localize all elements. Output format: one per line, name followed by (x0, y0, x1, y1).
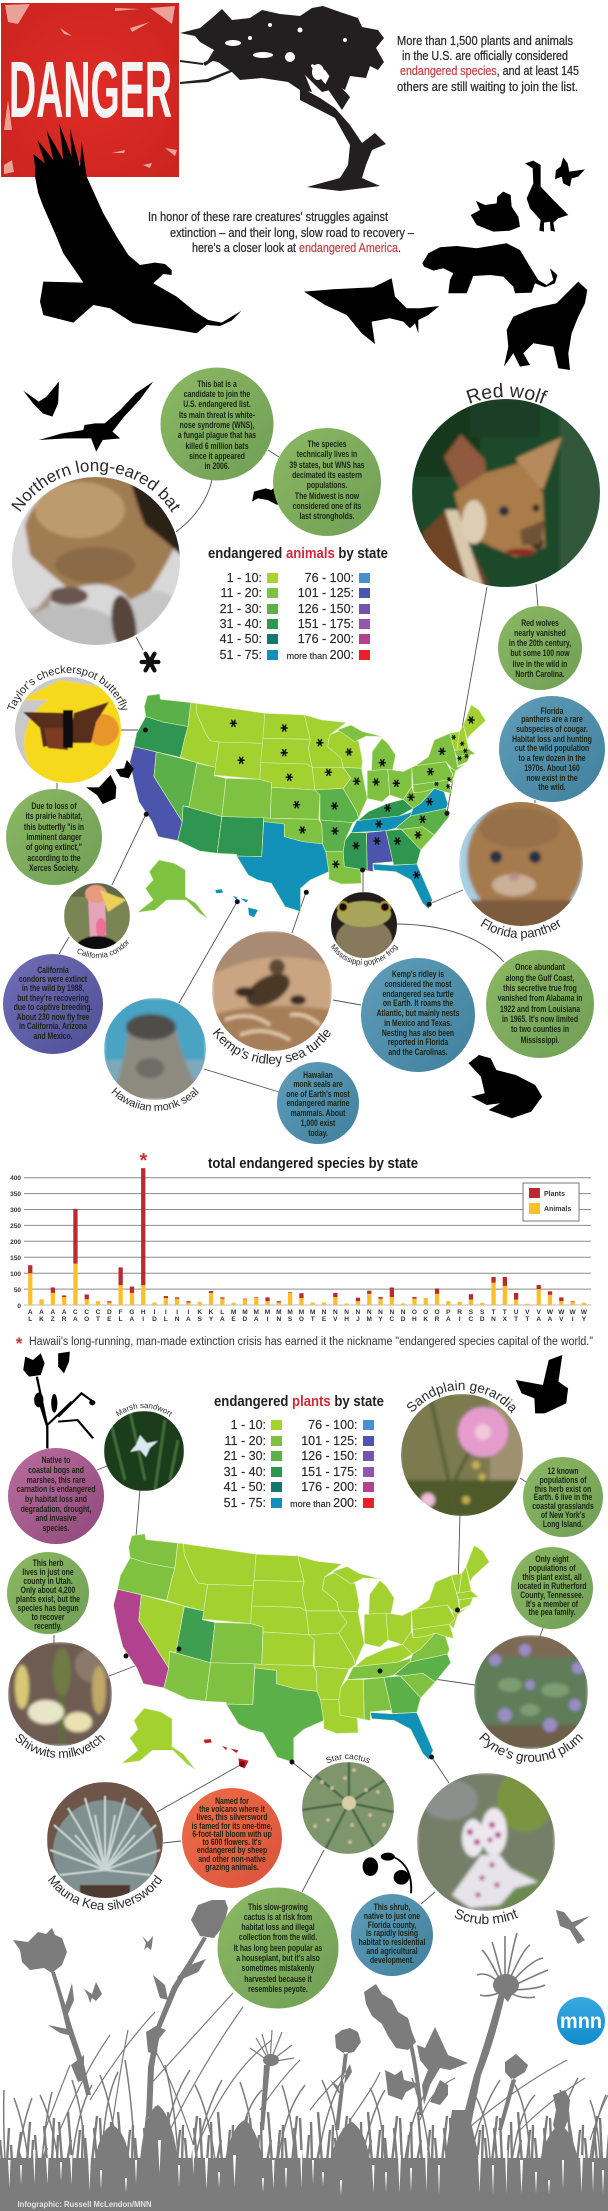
bubble: kemp's ridley: reported in Florida (388, 1037, 449, 1047)
bubble: scrub mint: native to just one (364, 1911, 421, 1921)
bubble: mauna kea silversword: Named for (215, 1796, 249, 1806)
legend: endangered animals: 76 - 100: (305, 571, 354, 585)
bubble: star cactus: habitat loss and illegal (241, 1922, 315, 1932)
bubble: star cactus: a houseplant, but it's also (236, 1953, 320, 1963)
bubble: sandplain gerardia: Earth. 6 live in the (534, 1492, 593, 1502)
bubble: star cactus: This slow-growing (248, 1902, 308, 1912)
label: mississippi gopher frog: Mississippi gopher frog (330, 944, 398, 966)
label: northern long-eared bat: Northern long-eared bat (11, 460, 180, 513)
photo: mauna kea silversword (47, 1782, 163, 1904)
photo: mississippi gopher frog (330, 892, 398, 962)
text: DANGER (9, 45, 172, 134)
tree silhouette (180, 6, 386, 191)
bubble: california condor: in California, Arizona (19, 1021, 88, 1031)
chart: total endangered species by state: 200 (10, 1239, 21, 1246)
bubble: bat range: The Midwest is now (295, 491, 360, 501)
label: sandplain gerardia: Sandplain gerardia (407, 1380, 516, 1414)
bubble: kemp's ridley: in Mexico and Texas. (384, 1018, 452, 1028)
grass clumps (95, 2105, 578, 2160)
bubble: scrub mint: and agricultural (366, 1946, 418, 1956)
icon: dragonfly (556, 1910, 590, 1944)
legend: endangered plants: 21 - 30: (224, 1449, 266, 1463)
credit: Infographic: Russell McLendon/MNN (18, 2199, 152, 2209)
chart: total endangered species by state: 0 (17, 1303, 21, 1310)
bubble: butterfly: Xerces Society. (29, 863, 79, 873)
bubble: florida panther: cut the wild population (515, 743, 589, 753)
legend: endangered animals: 151 - 175: (298, 617, 354, 631)
photo: hawaiian monk seal (104, 998, 206, 1100)
bubble: mauna kea silversword: grazing animals. (205, 1862, 259, 1872)
bubble: sandplain gerardia (523, 1457, 603, 1537)
bubble: red wolf: nearly vanished (514, 628, 566, 638)
bubble: bat range: populations. (307, 480, 347, 490)
intro text: others are still waiting to join the list. (397, 80, 578, 94)
bubble: gopher frog: Once abundant (515, 962, 565, 972)
photo: pyne's ground plum (474, 1635, 588, 1749)
bubble: hawaiian monk seal: monk seals are (293, 1079, 343, 1089)
bubble: star cactus: resembles peyote. (248, 1984, 308, 1994)
bubble: california condor: and Mexico. (33, 1031, 73, 1041)
bubble: california condor: condors were extinct (19, 974, 87, 984)
icon: frog (468, 1055, 542, 1118)
bubble: gopher frog: this secretive true frog (503, 983, 577, 993)
map markers: callout dots (143, 728, 450, 907)
photo: star cactus (302, 1762, 394, 1854)
bubble: gopher frog: in 1965. It's now limited (502, 1014, 578, 1024)
bubble: gopher frog: to two counties in (511, 1024, 569, 1034)
bubble: california condor (3, 954, 103, 1054)
asterisk (142, 654, 158, 670)
intro text: in the U.S. are officially considered (402, 49, 568, 63)
bubble: bat candidate: candidate to join the (184, 389, 251, 399)
label: pyne's ground plum: Pyne's ground plum (479, 1732, 584, 1764)
plant: small thistle (250, 2030, 294, 2130)
label: shivwits milkvetch: Shivwits milkvetch (16, 1734, 105, 1758)
bubble: star cactus: It has long been popular as (234, 1943, 323, 1953)
bubble: red wolf: in the 20th century, (509, 638, 571, 648)
bubble: gopher frog: Mississippi. (521, 1035, 559, 1045)
legend: endangered plants: 41 - 50: (224, 1480, 266, 1494)
plant: middle flower (146, 1900, 228, 2117)
icon: small butterflies (84, 1936, 153, 2003)
bubble: mauna kea silversword (182, 1788, 282, 1888)
bubble: hawaiian monk seal: endangered marine (286, 1098, 350, 1108)
bubble: shivwits milkvetch: species has begun (17, 1603, 79, 1613)
bubble: bat candidate: Its main threat is white- (179, 410, 255, 420)
bubble: florida panther: now exist in the (526, 773, 578, 783)
bubble: florida panther: panthers are a rare (521, 714, 583, 724)
bubble: red wolf: North Carolina. (515, 669, 565, 679)
bubble: marsh sandwort: degradation, drought, (21, 1504, 91, 1514)
bubble: gopher frog: along the Gulf Coast, (506, 973, 574, 983)
logo: mnn: mnn (560, 2010, 602, 2033)
icons: animal silhouettes (304, 157, 587, 370)
chart: total endangered species by state: 100 (10, 1271, 21, 1278)
bubble: mauna kea silversword: 6-foot-tall bloom with up (192, 1829, 272, 1839)
bubble: red wolf: but some 100 now (510, 648, 570, 658)
bubble: shivwits milkvetch: county in Utah. (23, 1576, 73, 1586)
bubble: hawaiian monk seal (277, 1062, 359, 1144)
bubble: star cactus: cactus is at risk from (244, 1912, 312, 1922)
bubble: marsh sandwort: coastal bogs and (28, 1465, 84, 1475)
bubble: bat candidate: nose syndrome (WNS), (180, 420, 254, 430)
legend: endangered animals: 51 - 75: (220, 648, 262, 662)
tall grass blades (45, 1993, 608, 2150)
bubble: hawaiian monk seal: today. (308, 1128, 328, 1138)
bubble: hawaiian monk seal: Hawaiian (303, 1070, 333, 1080)
bubble: sandplain gerardia: 12 known (547, 1466, 579, 1476)
legend: endangered plants: 31 - 40: (224, 1465, 266, 1479)
label: star cactus: Star cactus (326, 1754, 370, 1763)
bubble: star cactus: sometimes mistakenly (242, 1963, 315, 1973)
photo: marsh sandwort (104, 1411, 184, 1491)
bubble: shivwits milkvetch: This herb (33, 1558, 63, 1568)
bubble: scrub mint: habitat to residential (359, 1937, 425, 1947)
bubble: kemp's ridley: Kemp's ridley is (392, 969, 445, 979)
bubble: california condor: About 230 now fly free (17, 1012, 90, 1022)
intro text 2: In honor of these rare creatures' struggles against (148, 210, 388, 224)
bubble: bat candidate: U.S. endangered list. (183, 399, 251, 409)
bubble: bat candidate (160, 368, 274, 480)
bubble: bat candidate: a fungal plague that has (178, 430, 257, 440)
plant: right thistle (454, 1933, 548, 2160)
bubble: red wolf: Red wolves (521, 618, 559, 628)
label: marsh sandwort: Marsh sandwort (116, 1404, 172, 1417)
chart: total endangered species by state (10, 1150, 591, 1323)
bubble: florida panther: Florida (541, 706, 564, 716)
bubble: pyne's ground plum: located in Rutherford (517, 1581, 587, 1591)
label: florida panther: Florida panther (480, 918, 560, 941)
bubble: butterfly: of going extinct," (26, 842, 82, 852)
chart: total endangered species by state: AAAACCCDFGHIIIIKKLMMMMMMMMNNNNNNNNOOOPRSSTTUVVWWWW (28, 1309, 588, 1316)
intro text (397, 34, 579, 94)
icon: tiger (422, 243, 557, 293)
intro text: endangered species, and at least 145 (400, 64, 579, 78)
bubble: florida panther: 1970s. About 160 (524, 763, 580, 773)
bubble: scrub mint: Florida county, (368, 1920, 416, 1930)
label: kemp's ridley sea turtle: Kemp's ridley sea turtle (212, 1028, 330, 1067)
chart legend: Plants (544, 1191, 565, 1198)
photo: northern long-eared bat (12, 477, 180, 645)
bubble: florida panther: subspecies of cougar. (516, 724, 588, 734)
legend: endangered plants: 1 - 10: (231, 1418, 266, 1432)
chart: total endangered species by state: 50 (14, 1287, 21, 1294)
bubble: butterfly: this butterfly "is in (24, 822, 84, 832)
bubble: shivwits milkvetch: recently. (34, 1621, 62, 1631)
bubble: sandplain gerardia: of New York's (541, 1510, 586, 1520)
bubble: sandplain gerardia: populations of (539, 1475, 587, 1485)
bubble: california condor: in the wild by 1988, (22, 983, 84, 993)
icon: shark (304, 278, 439, 344)
bubble: pyne's ground plum: this plant exist, all (522, 1572, 582, 1582)
legend: endangered animals: 31 - 40: (220, 617, 262, 631)
map markers: asterisks (230, 717, 474, 878)
intro text 2 (148, 210, 414, 255)
bubble: pyne's ground plum: It's a member of (526, 1599, 578, 1609)
bubble: kemp's ridley: endangered sea turtle (382, 989, 454, 999)
intro text 2: extinction – and their long, slow road to recovery – (170, 226, 414, 240)
chart: total endangered species by state: 350 (10, 1191, 21, 1198)
icon: goose (525, 161, 568, 232)
bubble: kemp's ridley: considered the most (385, 979, 452, 989)
label: taylor's checkerspot butterfly: Taylor's checkerspot butterfly (7, 665, 128, 710)
bubble: butterfly (6, 789, 102, 885)
icon: wolf (504, 282, 587, 370)
white gaps in grass (8, 2140, 604, 2196)
legend: endangered animals: 126 - 150: (298, 602, 354, 616)
bubble: kemp's ridley (361, 958, 475, 1072)
bubble: kemp's ridley: and the Carolinas. (388, 1047, 448, 1057)
short grass blades (0, 2112, 608, 2162)
legend: endangered animals (208, 546, 388, 662)
bubble: scrub mint: is rapidly losing (366, 1928, 418, 1938)
danger sign (1, 3, 179, 177)
photo: florida panther (459, 798, 584, 930)
bubble: kemp's ridley: on Earth. It roams the (383, 998, 454, 1008)
bubble: california condor: due to captive breeding. (14, 1002, 92, 1012)
bubble: mauna kea silversword: endangered by sheep (197, 1845, 267, 1855)
bubble: butterfly: imminent danger (26, 832, 82, 842)
bubble: scrub mint (351, 1894, 433, 1976)
bubble: sandplain gerardia: coastal grasslands (532, 1501, 594, 1511)
bubble: pyne's ground plum: the pea family. (529, 1607, 575, 1617)
legend: endangered plants: 151 - 175: (301, 1465, 358, 1479)
bubble: shivwits milkvetch: to recover (31, 1612, 65, 1622)
legend: endangered plants: 126 - 150: (301, 1449, 358, 1463)
bubble: shivwits milkvetch: lives in just one (22, 1567, 74, 1577)
label: california condor: California condor (77, 940, 129, 958)
bubble: butterfly: Due to loss of (31, 801, 77, 811)
photo: california condor (64, 883, 130, 949)
medium grass blades (4, 2060, 606, 2160)
bubble: hawaiian monk seal: 1,000 exist (301, 1118, 336, 1128)
chart: total endangered species by state: 300 (10, 1207, 21, 1214)
bubble: shivwits milkvetch (7, 1552, 89, 1634)
intro text 2: here's a closer look at endangered America. (192, 241, 401, 255)
bubble: shivwits milkvetch: Only about 4,200 (21, 1585, 76, 1595)
photo: shivwits milkvetch (8, 1642, 115, 1746)
bubble: star cactus (218, 1888, 338, 2008)
bubble: kemp's ridley: Nesting has also been (382, 1028, 454, 1038)
intro text: More than 1,500 plants and animals (397, 34, 573, 48)
photo: scrub mint (417, 1768, 555, 1911)
icon: eagle (33, 124, 242, 333)
bubble: star cactus: harvested because it (244, 1974, 312, 1984)
legend: endangered plants: 51 - 75: (224, 1496, 266, 1510)
bubble: florida panther (499, 696, 605, 802)
icon: black plant (363, 1853, 411, 1893)
label: red wolf: Red wolf (466, 382, 548, 404)
bubble: gopher frog: 1922 and from Louisiana (500, 1004, 581, 1014)
bubble: florida panther: the wild. (538, 782, 566, 792)
legend: endangered plants: 176 - 200: (301, 1480, 358, 1494)
bubble: hawaiian monk seal: one of Earth's most (286, 1089, 350, 1099)
bubble: marsh sandwort (8, 1448, 104, 1544)
bubble: bat candidate: This bat is a (197, 379, 237, 389)
label: mauna kea silversword: Mauna Kea silversword (48, 1874, 162, 1910)
map: endangered plants by state (113, 1534, 489, 1770)
legend: endangered animals: 176 - 200: (298, 632, 354, 646)
footnote (16, 1334, 593, 1353)
bubble: bat candidate: in 2006. (204, 461, 230, 471)
photo: kemp's ridley sea turtle (212, 931, 332, 1052)
icon: butterfly (555, 157, 585, 187)
chart: total endangered species by state: 250 (10, 1223, 21, 1230)
bubble: pyne's ground plum: County, Tennessee. (520, 1590, 584, 1600)
bubble: red wolf (498, 606, 582, 690)
connector lines: plants (54, 1466, 543, 1904)
bubble: pyne's ground plum: populations of (528, 1563, 576, 1573)
bubble: california condor: but they're recovering (17, 993, 89, 1003)
legend: endangered animals: 11 - 20: (221, 586, 262, 600)
chart: total endangered species by state: 400 (10, 1175, 21, 1182)
legend: endangered plants: more than 200: (290, 1496, 358, 1510)
bubble: gopher frog (486, 950, 594, 1058)
bubble: butterfly: its prairie habitat, (26, 811, 82, 821)
footnote: * (16, 1334, 23, 1353)
bubble: bat range: The species (307, 439, 347, 449)
icons: bats (23, 382, 291, 505)
bubble: mauna kea silversword: is famed for its one-time, (192, 1821, 272, 1831)
bubble: florida panther: to a few dozen in the (518, 753, 586, 763)
bubble: marsh sandwort: and invasive (35, 1513, 77, 1523)
bubble: florida panther: Habitat loss and hunting (512, 734, 592, 744)
chart legend: Animals (544, 1206, 571, 1213)
chart: total endangered species by state: 150 (10, 1255, 21, 1262)
bubble: scrub mint: This shrub, (374, 1902, 410, 1912)
bubble: star cactus: collection from the wild. (239, 1932, 317, 1942)
bubble: marsh sandwort: carnation is endangered (17, 1484, 96, 1494)
legend: endangered animals: 101 - 125: (298, 586, 354, 600)
bubble: bat range: decimated its eastern (292, 470, 362, 480)
bubble: california condor: California (37, 965, 69, 975)
legend: endangered plants (214, 1394, 384, 1510)
legend title: endangered animals by state (208, 546, 388, 562)
legend: endangered animals: 1 - 10: (227, 571, 262, 585)
label: scrub mint: Scrub mint (454, 1909, 518, 1924)
bubble: hawaiian monk seal: mammals. About (291, 1108, 346, 1118)
bubble: pyne's ground plum (511, 1547, 593, 1629)
bubble: bat range: 39 states, but WNS has (289, 460, 365, 470)
legend: endangered animals: 41 - 50: (220, 632, 262, 646)
bubble: bat candidate: since it appeared (189, 451, 245, 461)
bubble: bat range: last strongholds. (299, 511, 355, 521)
map markers: plant callout dots (124, 1608, 460, 1767)
bubble: scrub mint: development. (370, 1955, 414, 1965)
grass base (0, 2158, 608, 2211)
bubble: sandplain gerardia: Long Island. (543, 1519, 583, 1529)
legend: endangered plants: 11 - 20: (225, 1434, 266, 1448)
legend: endangered animals: 21 - 30: (220, 602, 262, 616)
bubble: bat range (273, 428, 381, 536)
photo: taylor's checkerspot butterfly (15, 677, 121, 783)
bubble: marsh sandwort: Native to (42, 1455, 71, 1465)
bubble: butterfly: according to the (27, 853, 81, 863)
icon: black butterfly (516, 1355, 568, 1413)
bubble: sandplain gerardia: this herb exist on (535, 1484, 591, 1494)
icon: black flower (23, 1352, 95, 1448)
icon: duck (471, 192, 520, 232)
bubble: marsh sandwort: marshes, this rare (27, 1475, 86, 1485)
plant: corydalis (364, 1984, 468, 2115)
bubble: mauna kea silversword: and other non-native (198, 1854, 266, 1864)
bubble: pyne's ground plum: Only eight (535, 1554, 569, 1564)
label: hawaiian monk seal: Hawaiian monk seal (111, 1087, 199, 1112)
map: endangered animals by state (130, 694, 486, 918)
bubble: mauna kea silversword: lives, this silversword (196, 1812, 268, 1822)
photo: red wolf (410, 397, 602, 592)
grass and plant silhouettes (0, 1900, 608, 2211)
bubble: shivwits milkvetch: plants exist, but the (16, 1594, 81, 1604)
hawaii asterisk: * (140, 1150, 148, 1172)
plant: left flower (13, 1928, 91, 2095)
icons: butterflies (86, 760, 134, 804)
plant: small flowers (330, 2028, 570, 2140)
bubble: red wolf: live in the wild in (513, 659, 567, 669)
logo: mnn (557, 1997, 605, 2045)
legend: endangered plants: 101 - 125: (301, 1434, 358, 1448)
bubble: kemp's ridley: Atlantic, but mainly nests (377, 1008, 460, 1018)
photo: sandplain gerardia (400, 1393, 524, 1517)
bubble: bat range: considered one of its (293, 501, 362, 511)
bubble: marsh sandwort: by habitat loss and (25, 1494, 87, 1504)
legend title: endangered plants by state (214, 1394, 384, 1410)
chart legend (523, 1183, 579, 1221)
connector lines: animals (57, 450, 538, 1092)
bubble: bat range: technically lives in (297, 449, 357, 459)
legend: endangered animals: more than 200: (287, 648, 354, 662)
bubble: bat candidate: killed 6 million bats (185, 441, 249, 451)
chart: total endangered species by state: LKZRAOTELAIDLNASYAEDAINSOTEVHJMYCDHKRAICDNXTTAAVIY (28, 1316, 587, 1323)
chart title: total endangered species by state (208, 1155, 418, 1172)
bubble: mauna kea silversword: the volcano where it (199, 1804, 265, 1814)
bubble: marsh sandwort: species. (43, 1523, 69, 1533)
legend: endangered plants: 76 - 100: (308, 1418, 358, 1432)
bubble: gopher frog: vanished from Alabama in (498, 993, 583, 1003)
bubble: mauna kea silversword: to 600 flowers. It's (203, 1837, 262, 1847)
